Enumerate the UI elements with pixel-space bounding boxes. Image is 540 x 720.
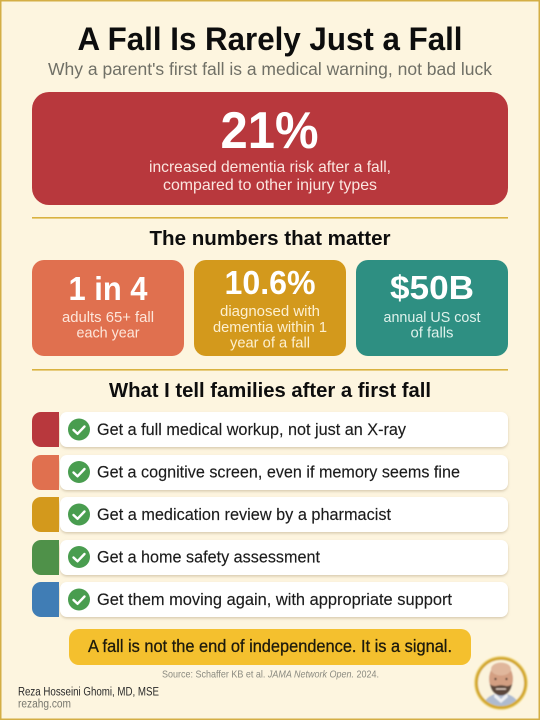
panel: stat 1 in 4: 1 in 4 (68, 270, 148, 307)
checklist row 3 (32, 497, 508, 532)
checklist row 5: Get them moving again, with appropriate support (97, 590, 452, 609)
callout (69, 629, 471, 665)
panel: stat 10.6%: diagnosed with (220, 303, 320, 320)
checklist row 4: Get a home safety assessment (97, 548, 320, 566)
panel: stat $50B: annual US cost (384, 309, 481, 326)
panel: hero statistic (32, 92, 508, 205)
checklist row 2: Get a cognitive screen, even if memory seems fine (97, 462, 460, 482)
panel: stat $50B: $50B (390, 269, 474, 306)
panel: stat 1 in 4: adults 65+ fall (62, 309, 154, 326)
heading: the numbers: The numbers that matter (150, 228, 391, 250)
title: A Fall Is Rarely Just a Fall (78, 21, 462, 57)
panel: stat $50B (356, 260, 508, 356)
checklist row 4 (32, 540, 508, 575)
checklist row 3: Get a medication review by a pharmacist (97, 505, 391, 524)
website: rezahg.com (18, 698, 71, 710)
callout: A fall is not the end of independence. It is a signal. (88, 636, 452, 656)
panel: stat 1 in 4 (32, 260, 184, 356)
checklist row 2 (32, 455, 508, 490)
heading: what I tell families: What I tell families after a first fall (109, 380, 431, 402)
panel: stat 10.6%: 10.6% (224, 264, 316, 301)
hero description: compared to other injury types (163, 177, 377, 194)
icon: author portrait (474, 656, 528, 710)
author name: Reza Hosseini Ghomi, MD, MSE (18, 686, 159, 698)
checklist row 1: Get a full medical workup, not just an X-ray (97, 420, 406, 439)
checklist row 5 (32, 582, 508, 617)
hero description (149, 159, 391, 194)
panel: stat 10.6%: dementia within 1 (213, 319, 327, 336)
source: Source: Schaffer KB et al. JAMA Network Open. 2024. (162, 668, 379, 680)
subtitle: Why a parent's first fall is a medical warning, not bad luck (48, 59, 492, 79)
panel: stat $50B: of falls (410, 324, 454, 342)
hero number: 21% (220, 102, 318, 160)
hero description: increased dementia risk after a fall, (149, 159, 391, 176)
panel: stat 10.6%: year of a fall (230, 334, 310, 352)
panel: stat 10.6% (194, 260, 346, 356)
checklist row 1 (32, 412, 508, 447)
panel: stat 1 in 4: each year (76, 324, 140, 342)
